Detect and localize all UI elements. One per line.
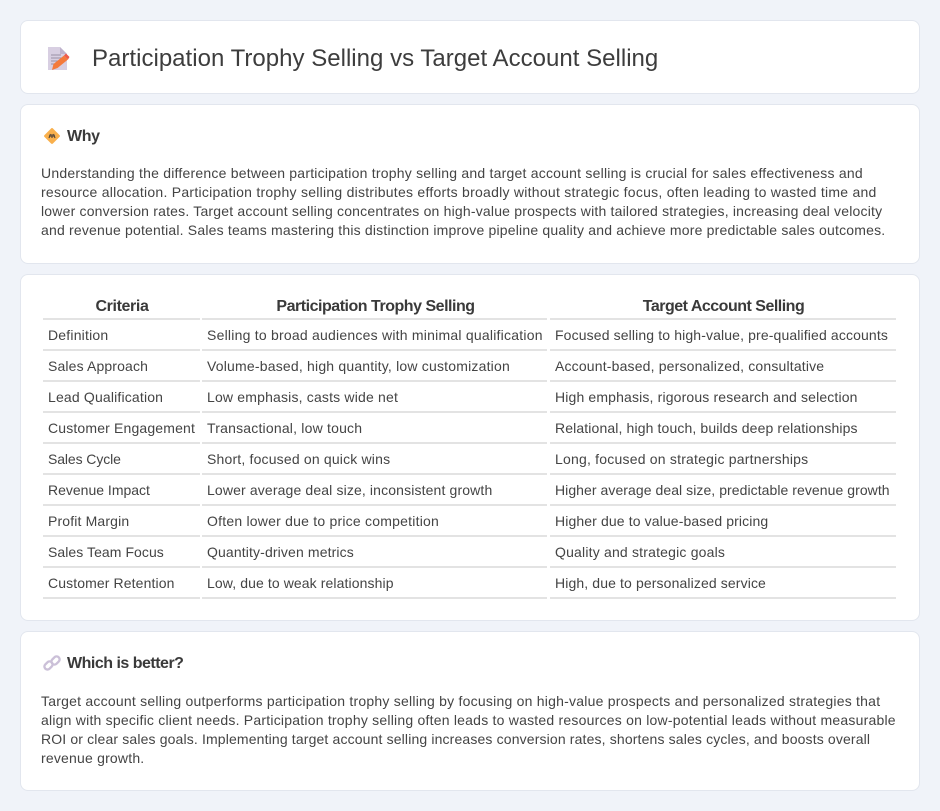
text block: which is better: ROI or clear sales goals. Implementing target account selling increases conversion rates, shortens sales cycles, and boosts overall (41, 731, 870, 747)
table: criteria comparison: Low emphasis, casts wide net (207, 389, 398, 405)
table: criteria comparison: Long, focused on strategic partnerships (555, 451, 808, 467)
table: criteria comparison: Selling to broad audiences with minimal qualification (207, 327, 543, 343)
table: criteria comparison: Customer Engagement (48, 420, 195, 436)
heading: why: Why (67, 128, 100, 145)
table: criteria comparison: Low, due to weak relationship (207, 575, 394, 591)
table: criteria comparison: Sales Approach (48, 358, 148, 374)
heading: which is better: Which is better? (67, 655, 183, 672)
table: criteria comparison: Often lower due to price competition (207, 513, 439, 529)
table: criteria comparison: Profit Margin (48, 513, 129, 529)
table: criteria comparison: High emphasis, rigorous research and selection (555, 389, 858, 405)
table: criteria comparison: Account-based, personalized, consultative (555, 358, 824, 374)
panel: title card (20, 20, 920, 94)
table: criteria comparison: Short, focused on quick wins (207, 451, 390, 467)
text block: which is better: Target account selling outperforms participation trophy selling by focusing on high-value prospects and personalized strategies that (41, 693, 880, 709)
table: criteria comparison (43, 298, 896, 599)
table: criteria comparison: Higher due to value-based pricing (555, 513, 768, 529)
text block: why: lower conversion rates. Target account selling concentrates on high-value prospects with tailored strategies, increasing deal velocity (41, 203, 882, 219)
panel: why (20, 104, 920, 264)
table: criteria comparison: Definition (48, 327, 108, 343)
icon: warning diamond (44, 128, 60, 144)
table: criteria comparison: Target Account Selling (643, 298, 804, 315)
table: criteria comparison: Transactional, low touch (207, 420, 362, 436)
table: criteria comparison: Focused selling to high-value, pre-qualified accounts (555, 327, 888, 343)
icon: chain link (43, 655, 61, 671)
table: criteria comparison: Quality and strategic goals (555, 544, 725, 560)
table: criteria comparison: Quantity-driven metrics (207, 544, 354, 560)
table: criteria comparison: Lower average deal size, inconsistent growth (207, 482, 492, 498)
icon: document with pencil (48, 47, 70, 70)
text block: why: Understanding the difference between participation trophy selling and target account selling is crucial for sales effectiveness and (41, 165, 863, 181)
table: criteria comparison: Sales Team Focus (48, 544, 164, 560)
table: criteria comparison: Higher average deal size, predictable revenue growth (555, 482, 890, 498)
text block: why (41, 165, 885, 238)
table: criteria comparison: Customer Retention (48, 575, 174, 591)
table: criteria comparison: Relational, high touch, builds deep relationships (555, 420, 858, 436)
table: criteria comparison: Participation Trophy Selling (276, 298, 475, 315)
table: criteria comparison: Sales Cycle (48, 451, 121, 467)
table: criteria comparison: Volume-based, high quantity, low customization (207, 358, 510, 374)
panel: which is better (20, 631, 920, 791)
table: criteria comparison: High, due to personalized service (555, 575, 766, 591)
text block: which is better (41, 693, 896, 766)
table: criteria comparison: Revenue Impact (48, 482, 150, 498)
title: Participation Trophy Selling vs Target Account Selling (92, 45, 658, 72)
text block: which is better: revenue growth. (41, 750, 144, 766)
panel: comparison table (20, 274, 920, 621)
text block: why: resource allocation. Participation trophy selling distributes efforts broadly without strategic focus, often leading to wasted time and (41, 184, 877, 200)
text block: which is better: align with specific client needs. Participation trophy selling often leads to wasted resources on low-potential leads without measurable (41, 712, 896, 728)
table: criteria comparison: Criteria (95, 298, 149, 315)
table: criteria comparison: Lead Qualification (48, 389, 163, 405)
text block: why: and revenue potential. Sales teams mastering this distinction improve pipeline quality and achieve more predictable sales outcomes. (41, 222, 885, 238)
